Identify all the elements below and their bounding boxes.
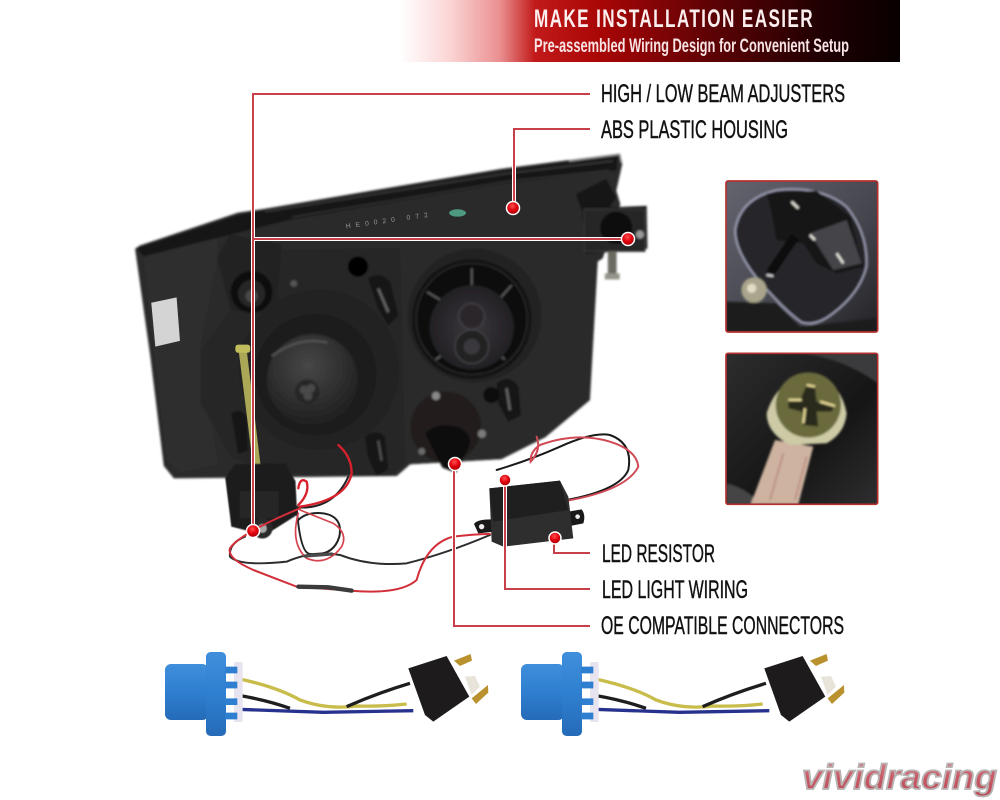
wires: [237, 678, 407, 707]
wires: [593, 678, 763, 707]
blue plug: [165, 664, 208, 720]
brass terminals: [810, 654, 844, 704]
callout dots: [246, 202, 634, 544]
label: abs plastic housing: ABS PLASTIC HOUSING: [601, 116, 788, 144]
small bulb bracket: [217, 235, 282, 314]
black connector: [764, 656, 825, 722]
upper shell: [292, 174, 616, 248]
red wires: [230, 508, 490, 592]
adapter harness right: [521, 652, 844, 736]
top flange: [137, 156, 618, 257]
label: high low beam adjusters: HIGH / LOW BEAM ADJUSTERS: [601, 80, 845, 108]
housing body: [135, 154, 622, 478]
green sticker: [449, 209, 466, 217]
adapter harness left: [165, 652, 488, 736]
banner title: MAKE INSTALLATION EASIER: [534, 5, 814, 33]
photo inset: adjuster screw: [726, 353, 878, 504]
label: led resistor: LED RESISTOR: [602, 540, 715, 568]
black connector: [408, 656, 469, 722]
box body: [489, 481, 573, 547]
mounting tabs: [474, 519, 495, 533]
lower adjuster bracket: [225, 464, 297, 538]
logo: vividracing: vividracing: [802, 758, 997, 797]
white pins: [234, 662, 243, 722]
white label: [151, 297, 180, 347]
heat shrink: [298, 587, 352, 591]
label: oe compatible connectors: OE COMPATIBLE CONNECTORS: [601, 612, 844, 640]
long screw: [239, 351, 261, 470]
black wires: [230, 535, 490, 564]
blue plug: [521, 664, 564, 720]
label: led light wiring: LED LIGHT WIRING: [602, 576, 748, 604]
wiring harness: [230, 434, 638, 592]
headlight housing: [135, 154, 647, 538]
LED resistor box: [474, 481, 584, 547]
low beam module: [201, 248, 405, 475]
right adjuster bracket: [576, 179, 647, 254]
connector socket: [410, 392, 481, 463]
high beam module: [407, 221, 590, 464]
white pins: [590, 662, 599, 722]
header banner: [400, 0, 900, 62]
adjuster knobs: [368, 275, 398, 326]
callout lines: [253, 94, 628, 626]
brass terminals: [454, 654, 488, 704]
banner subtitle: Pre-assembled Wiring Design for Convenient Setup: [534, 36, 849, 57]
embossed marking: HE0020 072: [345, 212, 429, 230]
photo inset: connector socket: [726, 181, 878, 332]
left panel: [144, 238, 218, 473]
